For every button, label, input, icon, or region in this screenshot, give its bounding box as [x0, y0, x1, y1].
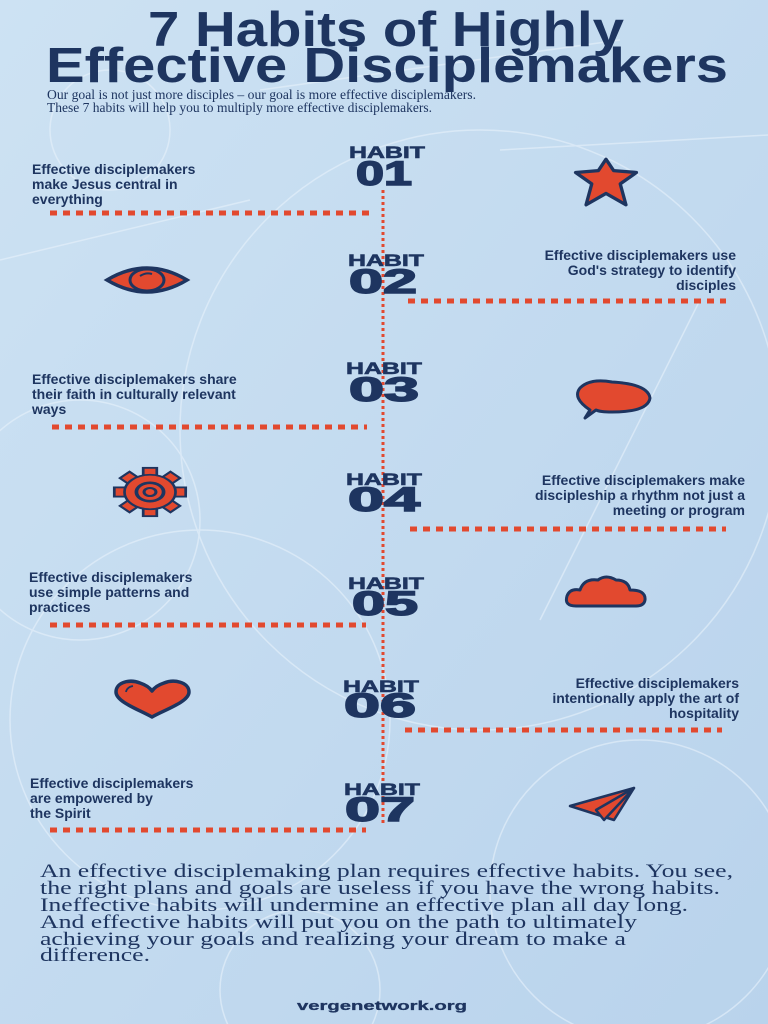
- habit 05: Effective disciplemakers: [29, 569, 193, 585]
- footer url: vergenetwork.org: [297, 998, 467, 1013]
- icon: paper plane: [570, 788, 634, 820]
- habit 06: Effective disciplemakers: [576, 675, 739, 691]
- body text: Ineffective habits will undermine an effective plan all day long.: [40, 895, 688, 916]
- habit 03: ways: [31, 401, 66, 417]
- habit 04: [346, 470, 745, 529]
- title: Effective Disciplemakers: [46, 37, 728, 93]
- habit 03: Effective disciplemakers share: [32, 371, 237, 387]
- habit 05: HABIT: [348, 574, 425, 593]
- habit 05: use simple patterns and: [29, 584, 189, 600]
- habit 07: [30, 775, 421, 830]
- habit 02: Effective disciplemakers use: [545, 247, 736, 263]
- habit 06: 06: [344, 687, 416, 725]
- habit 02: HABIT: [348, 251, 425, 270]
- subtitle: Our goal is not just more disciples – our goal is more effective disciplemakers.: [47, 87, 476, 102]
- icon: speech bubble: [578, 381, 650, 418]
- habit 01: everything: [32, 191, 103, 207]
- body text: difference.: [40, 945, 150, 966]
- title: 7 Habits of Highly: [148, 1, 624, 57]
- habit 07: the Spirit: [30, 805, 91, 821]
- habit 06: HABIT: [343, 677, 420, 696]
- title: [46, 1, 728, 93]
- habit 01: HABIT: [349, 143, 426, 162]
- habit 02: 02: [349, 263, 417, 301]
- habit 06: intentionally apply the art of: [552, 690, 739, 706]
- icon: gear: [114, 468, 186, 516]
- habit 01: 01: [356, 155, 412, 193]
- habit 07: are empowered by: [30, 790, 153, 806]
- habit 05: practices: [29, 599, 91, 615]
- habit 03: HABIT: [346, 359, 423, 378]
- habit 07: 07: [345, 791, 415, 829]
- body text: And effective habits will put you on the path to ultimately: [40, 912, 638, 933]
- subtitle: These 7 habits will help you to multiply more effective disciplemakers.: [47, 100, 432, 115]
- habit 01: Effective disciplemakers: [32, 161, 196, 177]
- habit 05: [29, 569, 425, 625]
- habit 01: [32, 143, 426, 213]
- habit 06: [343, 675, 739, 730]
- habit 03: [31, 359, 423, 427]
- habit 02: God's strategy to identify: [568, 262, 736, 278]
- habit 06: hospitality: [669, 705, 739, 721]
- habit 04: HABIT: [346, 470, 423, 489]
- icon: cloud: [566, 577, 645, 606]
- habit 04: Effective disciplemakers make: [542, 472, 745, 488]
- habit 03: 03: [349, 371, 419, 409]
- body text: the right plans and goals are useless if you have the wrong habits.: [40, 878, 720, 899]
- habit 02: disciples: [676, 277, 736, 293]
- body text: An effective disciplemaking plan requires effective habits. You see,: [40, 861, 733, 882]
- habit 01: make Jesus central in: [32, 176, 178, 192]
- habit 05: 05: [352, 585, 418, 623]
- timeline vertical line: [382, 190, 384, 826]
- habit 07: Effective disciplemakers: [30, 775, 194, 791]
- icon: star: [576, 159, 636, 205]
- icon: eye: [107, 268, 187, 292]
- habit 07: HABIT: [344, 780, 421, 799]
- habit 03: their faith in culturally relevant: [32, 386, 236, 402]
- habit 04: discipleship a rhythm not just a: [535, 487, 745, 503]
- habit 02: [348, 247, 736, 301]
- habit 04: 04: [348, 481, 420, 519]
- habit 04: meeting or program: [613, 502, 745, 518]
- subtitle: [47, 87, 476, 115]
- icon: heart: [116, 681, 189, 717]
- body text: achieving your goals and realizing your dream to make a: [40, 929, 627, 950]
- body text: [40, 861, 733, 966]
